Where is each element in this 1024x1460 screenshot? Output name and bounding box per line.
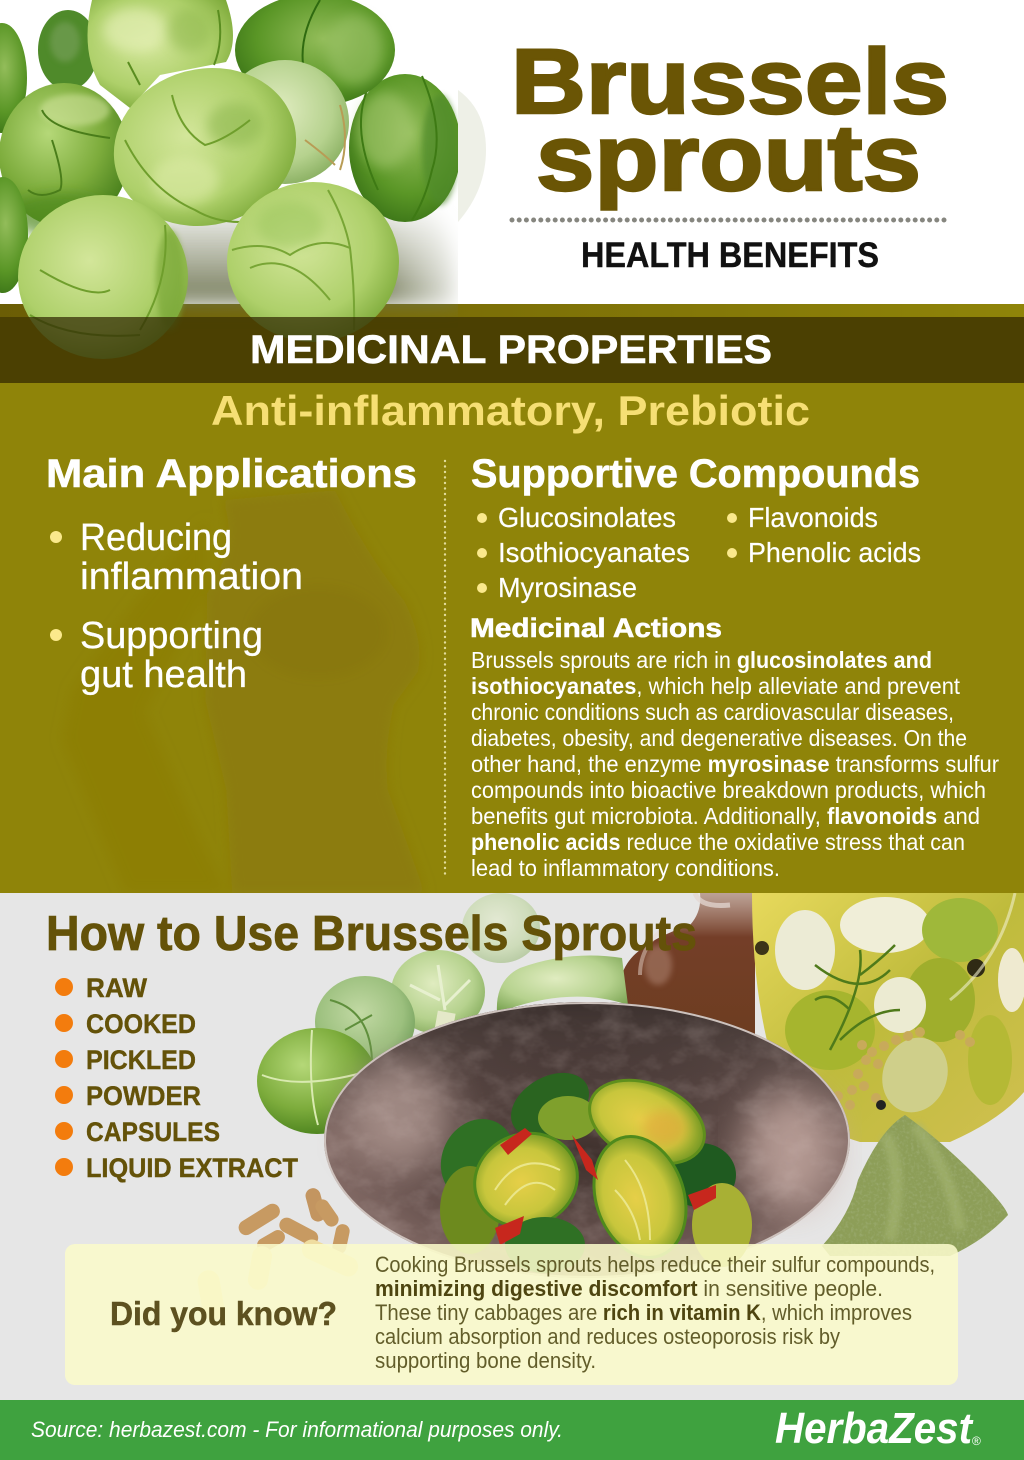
capsules seen through callout bbox=[304, 1240, 324, 1244]
roasted sprout: dark left bbox=[440, 1119, 510, 1254]
logo: HerbaZest: ® bbox=[972, 1434, 981, 1448]
heading: main applications: Main Applications bbox=[46, 452, 417, 496]
text block: medicinal actions: phenolic acids reduce the oxidative stress that can bbox=[471, 829, 965, 855]
footer bbox=[0, 1400, 1024, 1460]
list: usage forms: POWDER bbox=[86, 1081, 201, 1111]
list: usage forms: CAPSULES bbox=[86, 1117, 220, 1147]
source note: Source: herbazest.com - For informational purposes only. bbox=[31, 1417, 563, 1442]
sprout: top light bbox=[88, 0, 233, 108]
text block: medicinal actions: chronic conditions such as cardiovascular diseases, bbox=[471, 699, 954, 725]
sprout: mid bbox=[315, 976, 415, 1068]
panel: medicinal properties background bbox=[0, 304, 1024, 893]
panel: main applications bbox=[46, 452, 417, 696]
list: usage forms: LIQUID EXTRACT bbox=[86, 1153, 298, 1183]
text block: medicinal actions: other hand, the enzyme myrosinase transforms sulfur bbox=[471, 751, 999, 777]
logo: HerbaZest: HerbaZest bbox=[775, 1404, 974, 1453]
band: medicinal properties heading bbox=[0, 317, 1024, 383]
text block: medicinal actions: benefits gut microbiota. Additionally, flavonoids and bbox=[471, 803, 980, 829]
callout text: minimizing digestive discomfort in sensitive people. bbox=[375, 1276, 883, 1301]
bullet: supporting gut health bbox=[50, 615, 263, 696]
sprout: left edge bottom bbox=[0, 177, 28, 293]
callout text: calcium absorption and reduces osteoporosis risk by bbox=[375, 1324, 840, 1349]
subtitle: health benefits: HEALTH BENEFITS bbox=[581, 236, 879, 275]
illustration: pile of brussels sprouts bbox=[0, 0, 486, 359]
dotted column divider bbox=[444, 461, 446, 875]
callout: did you know bbox=[65, 1244, 958, 1385]
sprout: behind centre pale bbox=[245, 60, 349, 184]
sprout: faded top bbox=[462, 893, 540, 963]
roasted sprout: bottom bbox=[505, 1183, 752, 1273]
sprout: top right dark bbox=[235, 0, 395, 106]
text block: medicinal actions: isothiocyanates, which help alleviate and prevent bbox=[471, 673, 961, 699]
roasted sprout: dark right bbox=[674, 1143, 736, 1206]
compound list: Myrosinase bbox=[498, 572, 637, 603]
compound list: Flavonoids bbox=[748, 502, 878, 533]
text block: medicinal actions: diabetes, obesity, and degenerative diseases. On the bbox=[471, 725, 967, 751]
title: Brussels sprouts: Brussels bbox=[511, 31, 949, 133]
bullet: reducing inflammation: Reducing bbox=[80, 517, 232, 559]
heading: properties list: Anti-inflammatory, Prebiotic bbox=[211, 387, 810, 434]
bullet: reducing inflammation bbox=[50, 517, 303, 598]
sprout: small dark top left bbox=[38, 10, 94, 86]
sprout: bottom right bbox=[227, 182, 399, 342]
illustration: faint figure behind main applications bbox=[62, 490, 425, 893]
heading: how to use: How to Use Brussels Sprouts bbox=[46, 907, 697, 961]
compound list: Glucosinolates bbox=[498, 502, 676, 533]
amber bottle bbox=[621, 893, 755, 1040]
list: usage forms: PICKLED bbox=[86, 1045, 196, 1075]
heading: supportive compounds: Supportive Compounds bbox=[471, 452, 920, 496]
sprout: bottom left bbox=[18, 195, 188, 359]
sprout: right dark bbox=[349, 74, 461, 222]
roasted sprout: halved centre bbox=[592, 1135, 688, 1256]
callout heading: Did you know? bbox=[110, 1295, 337, 1332]
compound list: Isothiocyanates bbox=[498, 537, 690, 568]
callout text: Cooking Brussels sprouts helps reduce their sulfur compounds, bbox=[375, 1252, 935, 1277]
compound list: Phenolic acids bbox=[748, 537, 921, 568]
pickle jar bbox=[752, 893, 1024, 1142]
roasted sprout: halved left bbox=[473, 1132, 579, 1225]
band: medicinal properties heading: MEDICINAL PROPERTIES bbox=[250, 328, 772, 372]
sprout: centre bbox=[114, 68, 296, 226]
list: usage forms: COOKED bbox=[86, 1009, 196, 1039]
mustard seeds bbox=[821, 1027, 975, 1110]
text block: medicinal actions: Brussels sprouts are rich in glucosinolates and bbox=[471, 647, 932, 673]
callout text: supporting bone density. bbox=[375, 1348, 596, 1373]
illustration: product forms bbox=[196, 893, 1024, 1322]
panel: how to use background bbox=[0, 893, 1024, 1400]
roasted sprout: halved top right bbox=[588, 1078, 706, 1164]
roasted sprout: dark upper bbox=[511, 1072, 594, 1140]
powder pile bbox=[822, 1115, 1008, 1256]
title: Brussels sprouts: sprouts bbox=[536, 105, 921, 210]
soft shadow under sprouts bbox=[164, 213, 458, 315]
heading: medicinal actions: Medicinal Actions bbox=[470, 613, 722, 643]
bowl bbox=[324, 1002, 850, 1278]
list: usage forms: RAW bbox=[86, 973, 147, 1003]
dotted divider bbox=[512, 218, 949, 222]
list: usage forms bbox=[55, 973, 298, 1183]
bullet: supporting gut health: Supporting bbox=[80, 615, 263, 657]
panel: supportive compounds bbox=[470, 452, 999, 881]
capsules bbox=[236, 1187, 351, 1255]
callout text bbox=[375, 1252, 935, 1373]
roasted sprouts in bowl bbox=[428, 1060, 752, 1273]
bullet: reducing inflammation: inflammation bbox=[80, 556, 303, 598]
title: Brussels sprouts bbox=[511, 31, 949, 210]
compound list bbox=[477, 502, 921, 603]
text block: medicinal actions: lead to inflammatory conditions. bbox=[471, 855, 780, 881]
chili slices bbox=[495, 1128, 716, 1245]
sprout: cut pale top bbox=[391, 950, 485, 1034]
text block: medicinal actions: compounds into bioactive breakdown products, which bbox=[471, 777, 986, 803]
callout text: These tiny cabbages are rich in vitamin K, which improves bbox=[375, 1300, 912, 1325]
text block: medicinal actions bbox=[471, 647, 999, 881]
bullet: supporting gut health: gut health bbox=[80, 654, 247, 696]
faded ghost sprout bbox=[458, 90, 486, 222]
sprout: cut pale top right bbox=[497, 956, 628, 1013]
sprout: front green bbox=[257, 1028, 377, 1134]
sprout: left edge top bbox=[0, 23, 27, 133]
sprout: left mid bbox=[0, 83, 129, 237]
